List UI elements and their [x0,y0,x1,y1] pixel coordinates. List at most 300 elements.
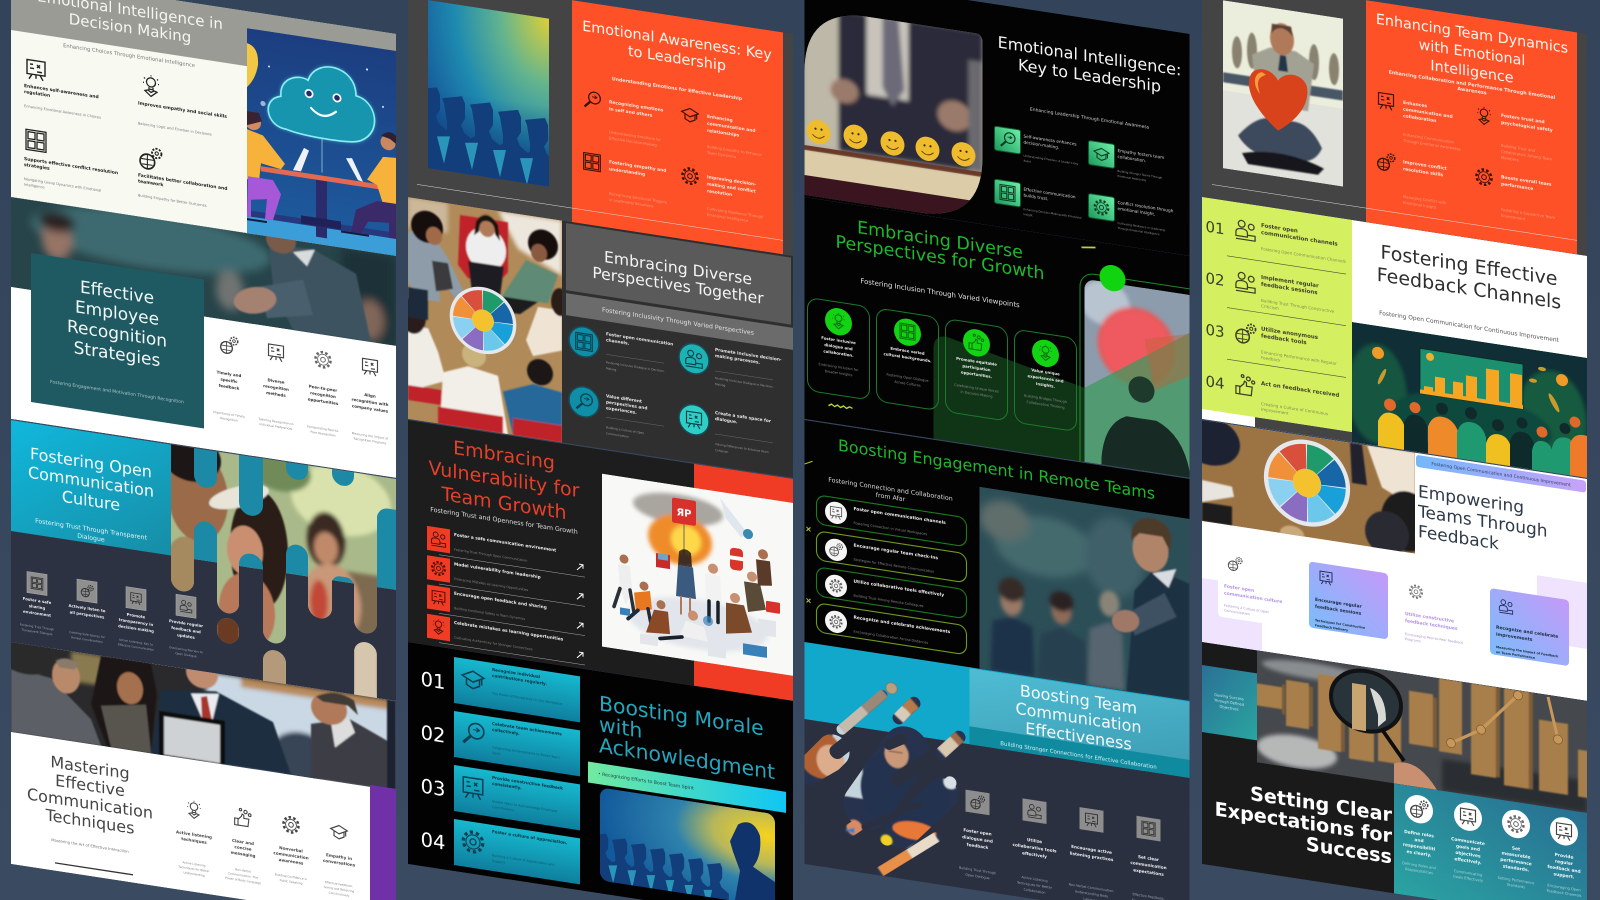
card caption: Fostering Open Dialogue [887,373,928,383]
subheading: Mastering the Art of Effective Interaction [51,837,129,854]
heading: Communication [1016,699,1141,737]
heading: Teams Through [1417,502,1548,542]
step 02 [421,706,580,776]
item text: sharing [29,603,45,611]
tag band [1416,455,1586,493]
item text: Supports effective conflict resolution [24,157,118,176]
icon circle [569,385,599,419]
step caption: Building Trust Through Constructive [1261,298,1334,314]
icon [971,794,984,810]
caption: Emotional Awareness [1118,174,1147,182]
step 04 [1205,369,1339,424]
item text: Set clear [1138,854,1159,862]
row caption: Fostering Trust Through Open Communication [454,548,527,563]
row caption: Building Emotional Safety in Team Dynamics [454,606,526,621]
icon tile [427,585,450,612]
caption: Enhancing Emotional Awareness in Choices [24,104,101,120]
row caption: Encouraging Collaboration Across Distances [854,630,928,645]
step text: Implement regular [1261,275,1319,290]
card text: experiences and [1028,373,1064,384]
illustration: audience facing speaker [588,786,775,900]
item text: responsibiliti [1403,842,1436,853]
subtitle band [566,293,793,350]
item text: feedback [219,383,240,391]
item text: concise [234,844,252,852]
heading: Embracing [453,436,555,474]
caption: Tailoring Recognition to [259,417,293,426]
row text: Celebrate mistakes as learning opportunities [454,620,564,643]
icon tile [126,587,146,611]
item text: regulation [24,89,50,99]
subheading: Understanding Emotions for Effective Leadership [612,76,743,102]
item text: Improves empathy and social skills [138,100,227,120]
item: diverse methods [263,343,289,399]
arrow [577,622,583,629]
separator and caption: Fostering Inclusive Dialogue in Decision- [715,376,774,389]
title panel [566,223,791,325]
caption: Giving and Receiving [324,885,354,894]
item text: teamwork [138,178,164,188]
caption: Recognizing Emotional Triggers [609,192,667,205]
subheading: Fostering Inclusivity Through Varied Perspectives [602,307,754,337]
row caption: Strategies for Effective Remote Communication [854,558,934,574]
item text: builds trust. [1024,193,1049,201]
title block [11,420,171,555]
subheading: Dialogue [77,533,105,544]
item text: Improving decision- [707,175,756,188]
icon disc [1405,793,1433,825]
step text: Foster open [1261,223,1298,235]
step text: Utilize anonymous [1261,326,1318,341]
projected bar chart [1420,348,1523,409]
item: tools [1012,797,1057,861]
heading: Effective [80,278,154,309]
item text: Facilitates better collaboration and [138,173,227,192]
caption: Encouraging Open [1547,883,1581,892]
item text: expectations [1133,867,1164,877]
step text: Act on feedback received [1261,381,1339,399]
item text: recognition with [352,397,389,407]
item: expectations [1130,815,1167,877]
item text: Foster open [963,827,992,837]
caption: Through Emotional Intelligence [1117,226,1160,236]
separator and caption [606,417,664,444]
step caption: Improvement [1261,407,1289,416]
heading: Embracing Diverse [604,247,752,289]
card caption: Communication [1224,608,1250,616]
item text: conversations [323,858,356,868]
heading: Team Growth [440,482,567,524]
item text: feedback and [1547,864,1581,875]
icon [830,506,842,520]
row rule [439,613,585,636]
caption: Cultivating Resilience in Leadership [1118,221,1165,232]
caption: Fostering Trust Through [20,622,54,632]
item text: Conflict resolution through [1118,200,1173,213]
row text: Encourage open feedback and sharing [454,591,547,611]
card caption: Feedback Delivery [1315,623,1349,632]
row rule [439,643,585,665]
heading: Emotional Intelligence: [998,33,1181,80]
step 03 [421,760,580,830]
card text: consistently. [492,781,522,790]
icon circle [963,327,990,358]
item text: making processes. [715,353,760,366]
icon circle [825,306,852,337]
item text: decision-making. [1024,140,1059,150]
number: 03 [421,775,445,801]
icon [433,618,444,635]
item text: decision-making [118,623,154,634]
row text: Foster a safe communication environment [454,532,556,554]
card caption: Contributions [492,805,514,812]
card text: cultural backgrounds. [884,351,932,364]
item text: transparency in [119,617,153,627]
icon [463,777,483,800]
illustration: audience watching bar chart in jungle [1352,322,1587,478]
caption: Insight [1024,212,1033,217]
icon tile [427,526,450,553]
caption: Importance of Timely [213,410,245,419]
card text: Utilize constructive [1405,612,1454,625]
icon [832,312,844,330]
heading: Fostering Effective [1380,240,1558,290]
row text: Model vulnerability from leadership [454,561,541,581]
cyan top band [804,642,1190,778]
item text: methods [266,390,286,398]
phone outline [1080,272,1210,497]
caption: Enhancing Communication [1403,132,1454,145]
item text: Enhances self-awareness and [24,84,99,100]
row outline [816,495,966,547]
caption: Active Listening [183,860,205,868]
icon [463,831,483,853]
item text: communication [1130,860,1167,870]
card 1 [808,297,870,400]
card text: feedback sessions [1315,604,1362,617]
caption: Honest Conversations [71,635,103,644]
icon [1378,152,1395,172]
card text: Foster open [1224,584,1254,594]
caption: Effective Decision-Making [609,136,657,148]
card 4 [1014,329,1076,432]
arrow [577,652,583,659]
card text: Celebrate team achievements [492,721,562,737]
icon tile [176,594,196,618]
item text: Align [364,392,376,399]
step rule [1227,308,1346,326]
item text: strategies [24,162,50,172]
photo: man holding heart [1223,0,1343,186]
item text: recognition [310,390,336,399]
item text: experiences. [606,405,637,416]
item text: specific [220,377,238,384]
card caption: Programs [1405,637,1421,643]
icon tile [1080,807,1104,833]
row outline [816,567,966,619]
separator and caption: Making [606,366,617,372]
icon disc [825,500,847,526]
icon [1000,184,1015,202]
item text: Promote [127,612,145,620]
card text: Promote equitable [956,356,997,367]
item: active listening [176,798,212,846]
panel: Empowering Teams Through Feedback slide [1180,413,1587,701]
heading: Boosting Morale [599,691,764,740]
subheading: Enhancing Choices Through Emotional Intelligence [63,43,195,69]
heading: Fostering Open [30,444,152,482]
card caption: The Power of Recognition in the Workplace [491,691,562,706]
icon [316,351,330,368]
row outline [816,603,966,655]
step caption: Creating a Culture of Continuous [1261,401,1328,416]
icon [1320,571,1332,586]
icon [432,590,445,606]
caption: Setting Performance [1498,876,1534,885]
card outline [876,308,938,411]
heading: Recognition [67,317,167,352]
caption: Measuring the Impact of [352,431,388,441]
item: communication [682,107,755,141]
item: conflict resolution [1088,193,1174,238]
panel: Fostering Open Communication Culture slide [11,395,407,709]
icon circle [894,317,921,348]
lilac accent shapes [1202,524,1587,701]
step caption: Fostering Open Communication Channels [1261,246,1346,264]
number: 04 [1205,372,1225,393]
subheading: Fostering Trust and Openness for Team Growth [430,506,578,536]
item text: support. [1554,871,1575,881]
row 2 [816,531,966,583]
row rule [439,555,585,577]
icon [1236,374,1255,396]
underline [55,862,133,875]
icon [180,600,192,613]
item: conflict [1378,152,1448,180]
item text: Diverse [267,377,285,385]
subtitle text: • Recognizing Efforts to Boost Team Spirit [598,771,694,792]
icon tile [994,179,1020,207]
card caption: Fostering a Culture of Open [1224,603,1269,614]
icon [221,335,238,355]
step rule [1227,359,1346,377]
card text: Value unique [1031,367,1060,377]
caption: Transparent Dialogue [21,627,53,636]
item: transparency [118,585,154,634]
item text: goals and [1456,843,1480,853]
item text: Fostering empathy and [609,160,666,174]
card text: Recognize individual [492,667,540,679]
heading: Embracing Diverse [857,218,1023,263]
icon tile [1136,816,1160,841]
icon [686,411,702,429]
arrow [577,564,583,571]
icon [1236,272,1255,293]
icon [463,722,484,745]
photo: wooden bars and magnifier [1257,650,1587,813]
caption: Building Empathy to Enhance [707,145,762,157]
caption: Active Listening: Key to [119,638,153,647]
caption: Building Confidence in [275,872,307,881]
icon [140,146,161,171]
item text: understanding [609,166,645,178]
item text: feedback and [171,625,201,634]
item: listening [1070,806,1114,862]
red accent block [694,464,793,701]
item: messaging [231,807,255,858]
row 3 [816,567,966,619]
squiggle accents [828,207,1096,447]
step text: feedback tools [1261,333,1307,346]
row text: Encourage regular team check-ins [854,543,938,561]
list row 3 [427,585,585,636]
item text: Enhances [1403,101,1427,109]
icon tile [427,555,450,583]
card caption: Celebrating Achievements to Boost Team [492,745,560,760]
icon [1142,821,1155,836]
item text: Self-awareness enhances [1024,134,1077,147]
number: 02 [421,721,445,748]
heading: Intelligence [1430,58,1514,87]
step rule [1227,256,1346,274]
card [454,657,580,722]
card text: improvements [1496,632,1533,643]
heading: Feedback [1418,522,1499,554]
item: roles [1403,793,1436,859]
item text: in self and others [609,106,653,119]
translucent green overlay [934,335,1084,462]
card text: Recognize and celebrate [1496,625,1558,640]
icon [27,59,45,81]
icon [576,392,592,411]
icon [284,816,298,833]
step 01 [1205,215,1346,264]
caption: Understanding [183,870,205,878]
row rule [439,584,585,606]
icon disc [1502,808,1530,840]
icon disc [1550,815,1578,848]
subheading: from Afar [876,492,906,503]
card 1 [1218,552,1308,630]
item: peer to peer [308,350,339,406]
card [454,819,580,884]
caption: Constructively [329,891,350,898]
item: empathy [1088,140,1164,185]
tagline text: Guiding Success [1214,693,1244,701]
illustration: silhouettes on gradient [428,0,549,187]
heading: Techniques [45,805,134,838]
card text: feedback techniques [1405,618,1458,632]
card text: Foster inclusive [821,335,856,345]
separator and caption: Building a Culture of Open [606,425,644,435]
caption: Recognition [220,416,238,423]
list row 4 [427,614,585,665]
icon tile [27,571,47,596]
row 4 [816,603,966,655]
item: standards [1500,808,1532,874]
heading: Boosting Engagement in Remote Teams [838,436,1155,503]
separator and caption: Communication [606,431,629,439]
icon [235,808,251,827]
panel: Embracing Diverse Perspectives for Growth slide [804,197,1210,497]
item text: Encourage active [1071,844,1112,855]
item: safe space [679,402,772,447]
card caption: Collaborative Thinking [1026,400,1065,410]
caption: Communication: The [228,871,258,880]
icon [1001,132,1015,148]
caption: Overcoming Barriers to [169,645,203,654]
card [1218,552,1308,630]
item text: company values [352,403,389,414]
separator and caption [606,354,665,379]
item text: collaboration [1403,113,1436,124]
item text: emotional insight. [1118,206,1155,217]
panel: Emotional Intelligence Key to Leadership slide [804,0,1190,256]
item: decision making [682,167,756,202]
card [454,711,580,776]
item text: all perspectives [70,609,105,620]
item text: Foster a safe [23,596,51,605]
item text: collaboration. [1118,154,1146,163]
item text: perspectives and [606,399,647,412]
heading: Communication [28,463,154,501]
card caption: Across Cultures [894,380,921,388]
caption: Balancing Logic and Emotion in Decisions [138,121,212,137]
caption: Collaboration [1024,888,1045,895]
icon disc [825,573,847,599]
item text: Foster open communication [606,332,673,348]
step caption: Feedback [1261,355,1281,363]
card outline [808,297,870,400]
orange panel [572,0,783,254]
icon [187,800,201,819]
item text: Provide regular [169,618,203,628]
icon [131,593,141,605]
icon tile [427,614,450,641]
item text: objectives [1455,850,1481,860]
subheading: Fostering Engagement and Motivation Through Recognition [50,379,184,405]
item text: Define roles [1404,830,1434,839]
panel: Mastering Effective Communication Techniques slide [0,627,396,900]
item: inclusive decisions [679,341,782,387]
heading: Emotional Awareness: Key [582,19,772,64]
photo: capsule cut people [798,641,980,891]
caption: Open Dialogue [175,651,197,658]
separator and caption [715,371,774,395]
tagline text: Objectives [1220,705,1239,712]
caption: Understanding Emotions for [609,130,661,142]
icon tile [994,126,1020,154]
arrow [577,593,583,600]
icon [1028,804,1041,819]
icon disc [825,537,847,563]
item: open channels [569,325,673,371]
heading: Key to Leadership [1018,55,1161,96]
card caption: Measuring the Impact of Feedback [1496,645,1558,658]
icon tile [1088,193,1114,221]
orange panel [1366,0,1577,254]
item text: messaging [231,850,255,858]
caption: Techniques for Better [178,865,210,873]
caption: Creating Safe Spaces for [69,630,105,639]
separator and caption: Valuing Differences to Enhance Team [715,442,769,454]
card text: opportunities. [961,369,993,379]
heading: Employee [75,297,159,330]
item text: recognition [263,383,289,392]
heading: Enhancing Team Dynamics [1376,12,1568,57]
item text: effectively. [1454,856,1482,866]
audience [1378,386,1587,478]
